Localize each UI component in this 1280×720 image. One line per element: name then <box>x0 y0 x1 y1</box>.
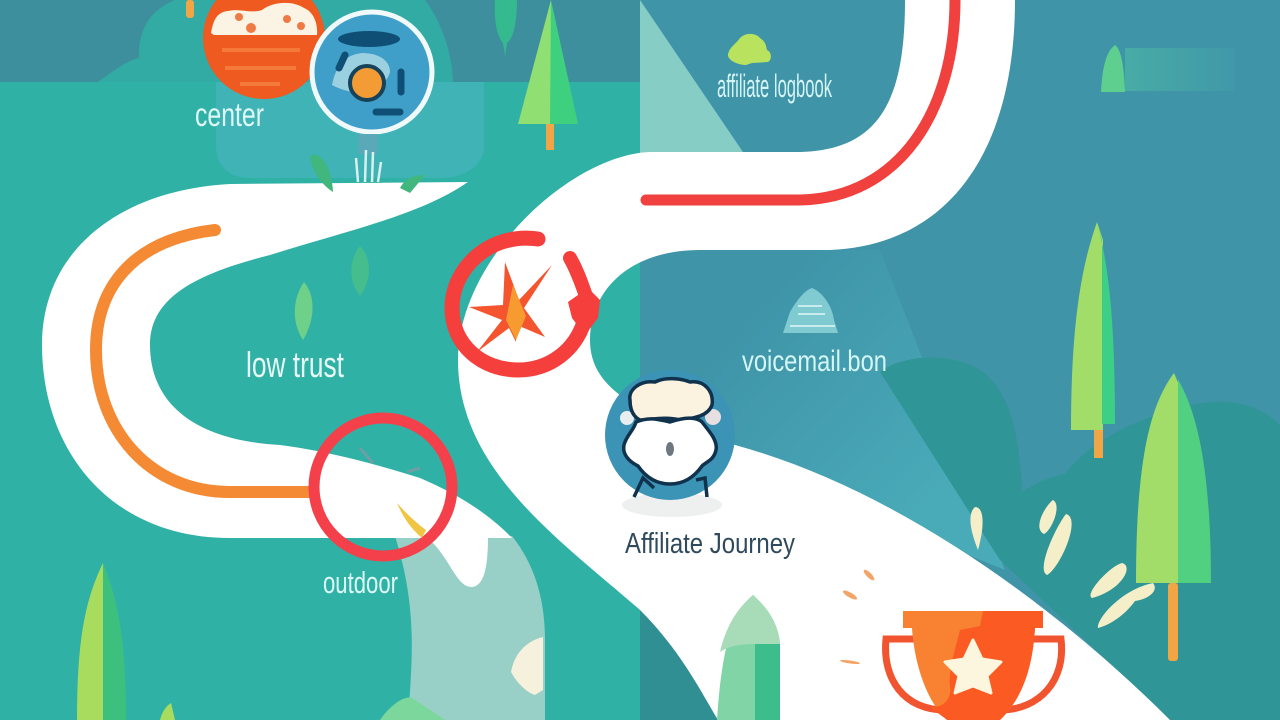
label: middle right: voicemail.bon <box>742 345 887 378</box>
right winding road <box>458 0 1170 720</box>
red route line <box>646 0 955 200</box>
orange route line <box>96 230 312 492</box>
road drip <box>425 536 488 587</box>
road shadow below mascot <box>622 493 722 517</box>
label: outdoor: outdoor <box>323 565 398 600</box>
tree: top left stub <box>186 0 194 18</box>
label: Affiliate Journey: Affiliate Journey <box>625 528 795 560</box>
tree: small top left <box>495 0 517 56</box>
tree: top centre <box>518 0 578 150</box>
tree: top right small <box>1101 45 1125 92</box>
tree: bottom left <box>77 563 126 720</box>
label: low trust: low trust <box>246 344 344 385</box>
left winding road <box>42 182 512 538</box>
leaf tufts left <box>295 246 369 340</box>
icon: red prohibited star <box>452 238 600 370</box>
icon: red ring with yellow spark <box>314 418 452 556</box>
pale waterfall under road <box>395 536 545 720</box>
icon: green tree cloud <box>728 34 771 65</box>
icon: blue gear badge <box>312 12 432 132</box>
icon: orange food badge <box>203 0 325 99</box>
cream blob <box>511 637 543 695</box>
tree: right large <box>1136 373 1211 661</box>
icon: sheep mascot badge <box>605 370 735 500</box>
leaves bottom <box>160 697 445 720</box>
green gem tree bottom <box>717 595 780 720</box>
label: top right title: affiliate logbook <box>717 68 833 104</box>
icon: trophy with star <box>886 611 1062 720</box>
cream leaf confetti <box>970 500 1155 628</box>
tree: right tall <box>1071 222 1115 458</box>
icon: building <box>783 288 838 333</box>
small plants on road edge <box>310 134 425 193</box>
small orange sparks <box>840 568 876 665</box>
label: center: center <box>195 96 264 133</box>
